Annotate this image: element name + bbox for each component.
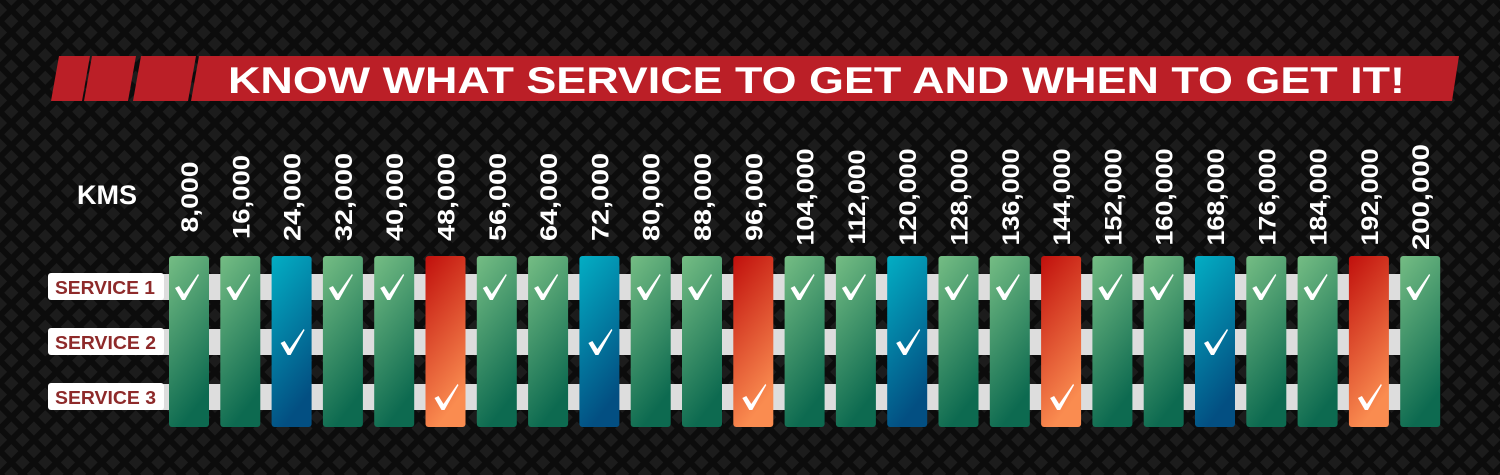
service labels: SERVICE 2 [55, 333, 156, 353]
columns: 16,000 [228, 155, 255, 239]
columns: 168,000 [1203, 148, 1230, 246]
columns: 176,000 [1254, 148, 1281, 246]
columns: 128,000 [946, 148, 974, 246]
title banner [51, 56, 1459, 101]
service labels: SERVICE 3 [55, 388, 156, 408]
columns: 64,000 [536, 153, 563, 241]
columns: 80,000 [639, 153, 666, 241]
service row strips [160, 274, 1440, 410]
columns: 88,000 [690, 153, 717, 241]
columns: 8,000 [177, 162, 204, 232]
columns: 200,000 [1408, 144, 1435, 250]
columns: 192,000 [1357, 148, 1384, 246]
columns: 144,000 [1049, 148, 1076, 246]
columns: 104,000 [793, 148, 820, 246]
columns: 120,000 [895, 148, 922, 246]
KMS label: KMS [77, 180, 137, 210]
columns: 72,000 [587, 153, 614, 241]
columns: 152,000 [1100, 148, 1127, 246]
columns: 96,000 [741, 153, 768, 241]
service labels: SERVICE 1 [55, 278, 155, 298]
columns [169, 144, 1440, 427]
columns: 32,000 [331, 153, 358, 241]
columns: 40,000 [382, 153, 409, 241]
columns: 24,000 [280, 153, 307, 241]
columns: 56,000 [485, 153, 512, 241]
columns: 112,000 [844, 150, 871, 244]
service labels [48, 273, 164, 410]
title: KNOW WHAT SERVICE TO GET AND WHEN TO GET IT! [228, 60, 1405, 101]
columns: 136,000 [998, 148, 1025, 246]
columns: 160,000 [1152, 148, 1179, 246]
columns: 184,000 [1306, 148, 1333, 246]
columns: 48,000 [434, 153, 460, 241]
